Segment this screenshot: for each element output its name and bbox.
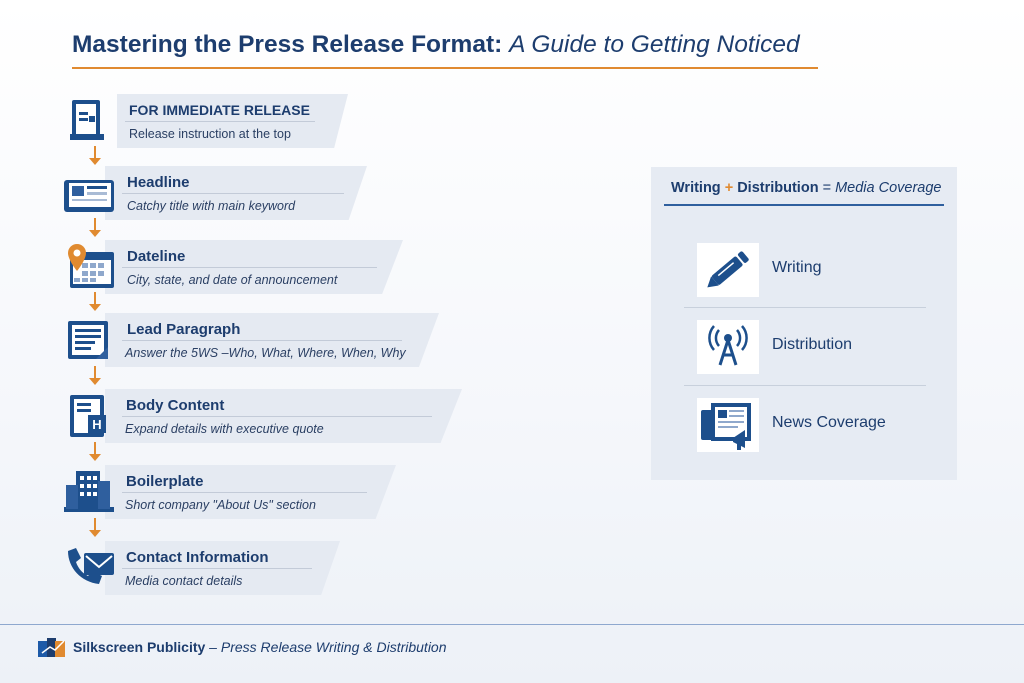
- icon: logo: [38, 638, 65, 657]
- step 5: body content: Body Content: [126, 397, 224, 414]
- icon: phone and envelope: [68, 548, 114, 584]
- step 1: for immediate release: FOR IMMEDIATE RELEASE: [129, 102, 310, 118]
- arrow: [89, 292, 101, 311]
- writing row: Writing: [772, 259, 822, 276]
- arrow: [89, 442, 101, 461]
- icon: building: [64, 471, 114, 512]
- step 2: headline: Catchy title with main keyword: [127, 199, 295, 213]
- step 6: boilerplate: Boilerplate: [126, 473, 204, 490]
- icon: newspaper: [64, 180, 114, 212]
- step 4: lead paragraph: Answer the 5WS –Who, What, Where, When, Why: [125, 346, 406, 360]
- icon: calendar with pin: [68, 244, 114, 288]
- step 7: contact information: [105, 541, 340, 595]
- step 7: contact information: Media contact details: [125, 574, 242, 588]
- step 7: contact information: Contact Information: [126, 549, 268, 566]
- arrow: [89, 518, 101, 537]
- step 3: dateline: Dateline: [127, 248, 185, 265]
- icon: document with H: [70, 395, 106, 437]
- step 6: boilerplate: Short company "About Us" section: [125, 498, 316, 512]
- step 4: lead paragraph: Lead Paragraph: [127, 321, 240, 338]
- step 3: dateline: [105, 240, 403, 294]
- step 6: boilerplate: [105, 465, 396, 519]
- icon: document: [70, 100, 104, 140]
- icon: paragraph: [68, 321, 108, 359]
- step 2: headline: Headline: [127, 174, 190, 191]
- step 1: for immediate release: Release instruction at the top: [129, 127, 291, 141]
- step 2: headline: [105, 166, 367, 220]
- panel: writing + distribution: [651, 167, 957, 480]
- writing row: [697, 243, 822, 297]
- footer: Silkscreen Publicity – Press Release Writing & Distribution: [73, 639, 447, 655]
- step 1: for immediate release: [117, 94, 348, 148]
- step 3: dateline: City, state, and date of announcement: [127, 273, 337, 287]
- arrow: [89, 218, 101, 237]
- panel heading: Writing + Distribution = Media Coverage: [671, 180, 942, 196]
- step 4: lead paragraph: [105, 313, 439, 367]
- arrow: [89, 146, 101, 165]
- distribution row: [697, 320, 852, 374]
- icon: document with H: H: [92, 417, 102, 432]
- step 5: body content: [105, 389, 462, 443]
- step 5: body content: Expand details with executive quote: [125, 422, 324, 436]
- news coverage row: News Coverage: [772, 414, 886, 431]
- title: Mastering the Press Release Format: A Guide to Getting Noticed: [72, 31, 800, 58]
- distribution row: Distribution: [772, 336, 852, 353]
- arrow: [89, 366, 101, 385]
- news coverage row: [697, 398, 886, 452]
